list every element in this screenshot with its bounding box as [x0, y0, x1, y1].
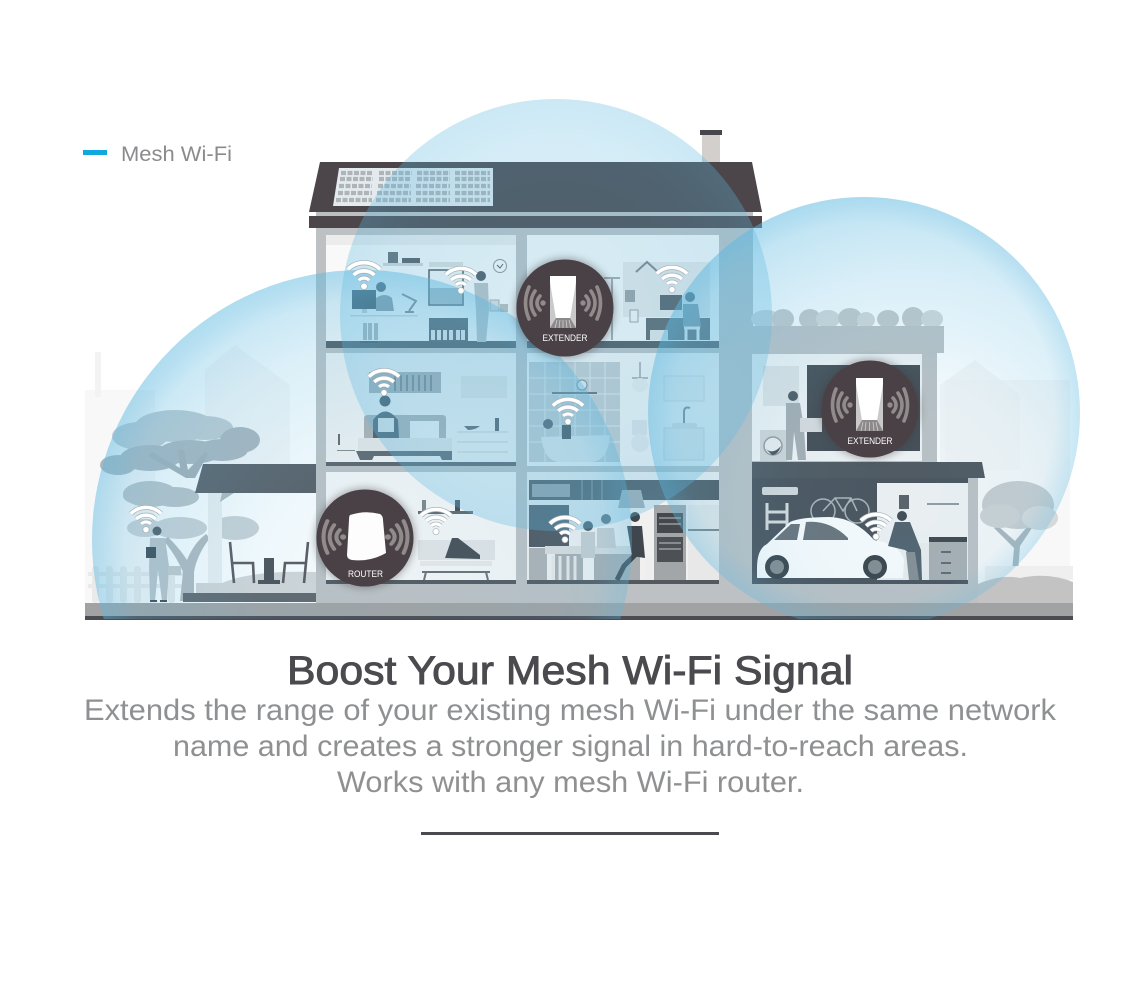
solar panels: [333, 168, 493, 206]
room: living room lower left: [326, 472, 516, 584]
ground: [85, 603, 1073, 620]
garage: [752, 478, 968, 584]
wifi icons: [131, 263, 891, 543]
annex: roof slab: [752, 326, 944, 353]
garage roof: [752, 462, 985, 478]
circle: upper extender coverage: [340, 99, 772, 531]
fence left: [88, 566, 188, 603]
circle: side extender coverage: [648, 197, 1080, 629]
room: study upper right: [527, 235, 719, 348]
badge: upper extender: EXTENDER: [542, 333, 588, 344]
chimney: [700, 130, 722, 164]
tree right: [980, 481, 1058, 572]
divider: [421, 832, 719, 835]
description: Works with any mesh Wi-Fi router.: [337, 766, 804, 799]
description: Extends the range of your existing mesh Wi-Fi under the same network: [84, 694, 1057, 727]
badge: upper extender: [515, 258, 615, 358]
room: office upper left: [326, 235, 516, 348]
description: name and creates a stronger signal in hard-to-reach areas.: [173, 730, 968, 763]
roof: [309, 162, 762, 228]
room: bathroom middle right: [527, 353, 719, 466]
bushes and fence right: [978, 566, 1073, 604]
porch left: [183, 464, 316, 602]
badge: router: ROUTER: [348, 569, 383, 580]
annex: green roof plants: [751, 307, 943, 329]
title: Boost Your Mesh Wi-Fi Signal: [287, 649, 853, 693]
room: bedroom middle left: [326, 353, 516, 466]
legend: Mesh Wi-Fi: Mesh Wi-Fi: [121, 143, 232, 166]
tree left: [100, 410, 260, 601]
mesh coverage circles: [92, 99, 1080, 619]
room: kitchen lower right: [527, 472, 719, 584]
person outdoors: [146, 526, 181, 602]
badge: side extender: EXTENDER: [848, 436, 893, 447]
badge: side extender: [820, 359, 920, 459]
faint background neighbourhood skyline: [85, 345, 1070, 605]
description: [84, 694, 1057, 799]
annex: laundry room: [752, 354, 922, 461]
house body and walls: [316, 228, 978, 604]
circle: router coverage: [92, 270, 632, 619]
badge: router: [315, 488, 415, 588]
